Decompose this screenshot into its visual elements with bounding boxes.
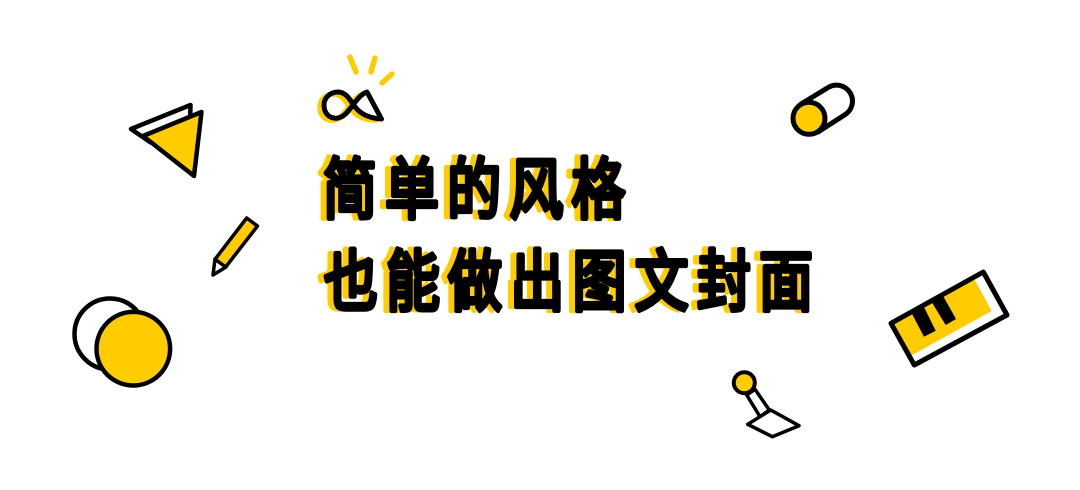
icon: pencil — [213, 218, 258, 275]
title shadow line 2: 也能做出图文封面 — [318, 244, 807, 319]
title line 1: 简单的风格 — [323, 152, 625, 227]
icon: ruler card — [890, 272, 1007, 365]
icon: yellow rays — [350, 57, 392, 83]
icon: logo black mark — [324, 92, 382, 119]
icon: pin with diamond — [734, 372, 799, 437]
icon: cylinder — [793, 85, 852, 134]
logo with rays — [320, 57, 392, 120]
title line 2: 也能做出图文封面 — [324, 244, 813, 319]
icon: logo yellow shadow — [320, 94, 376, 120]
icon: folded triangle — [131, 105, 202, 176]
title shadow line 1: 简单的风格 — [317, 152, 619, 227]
icon: overlapping circles — [74, 298, 170, 386]
title — [317, 152, 813, 319]
